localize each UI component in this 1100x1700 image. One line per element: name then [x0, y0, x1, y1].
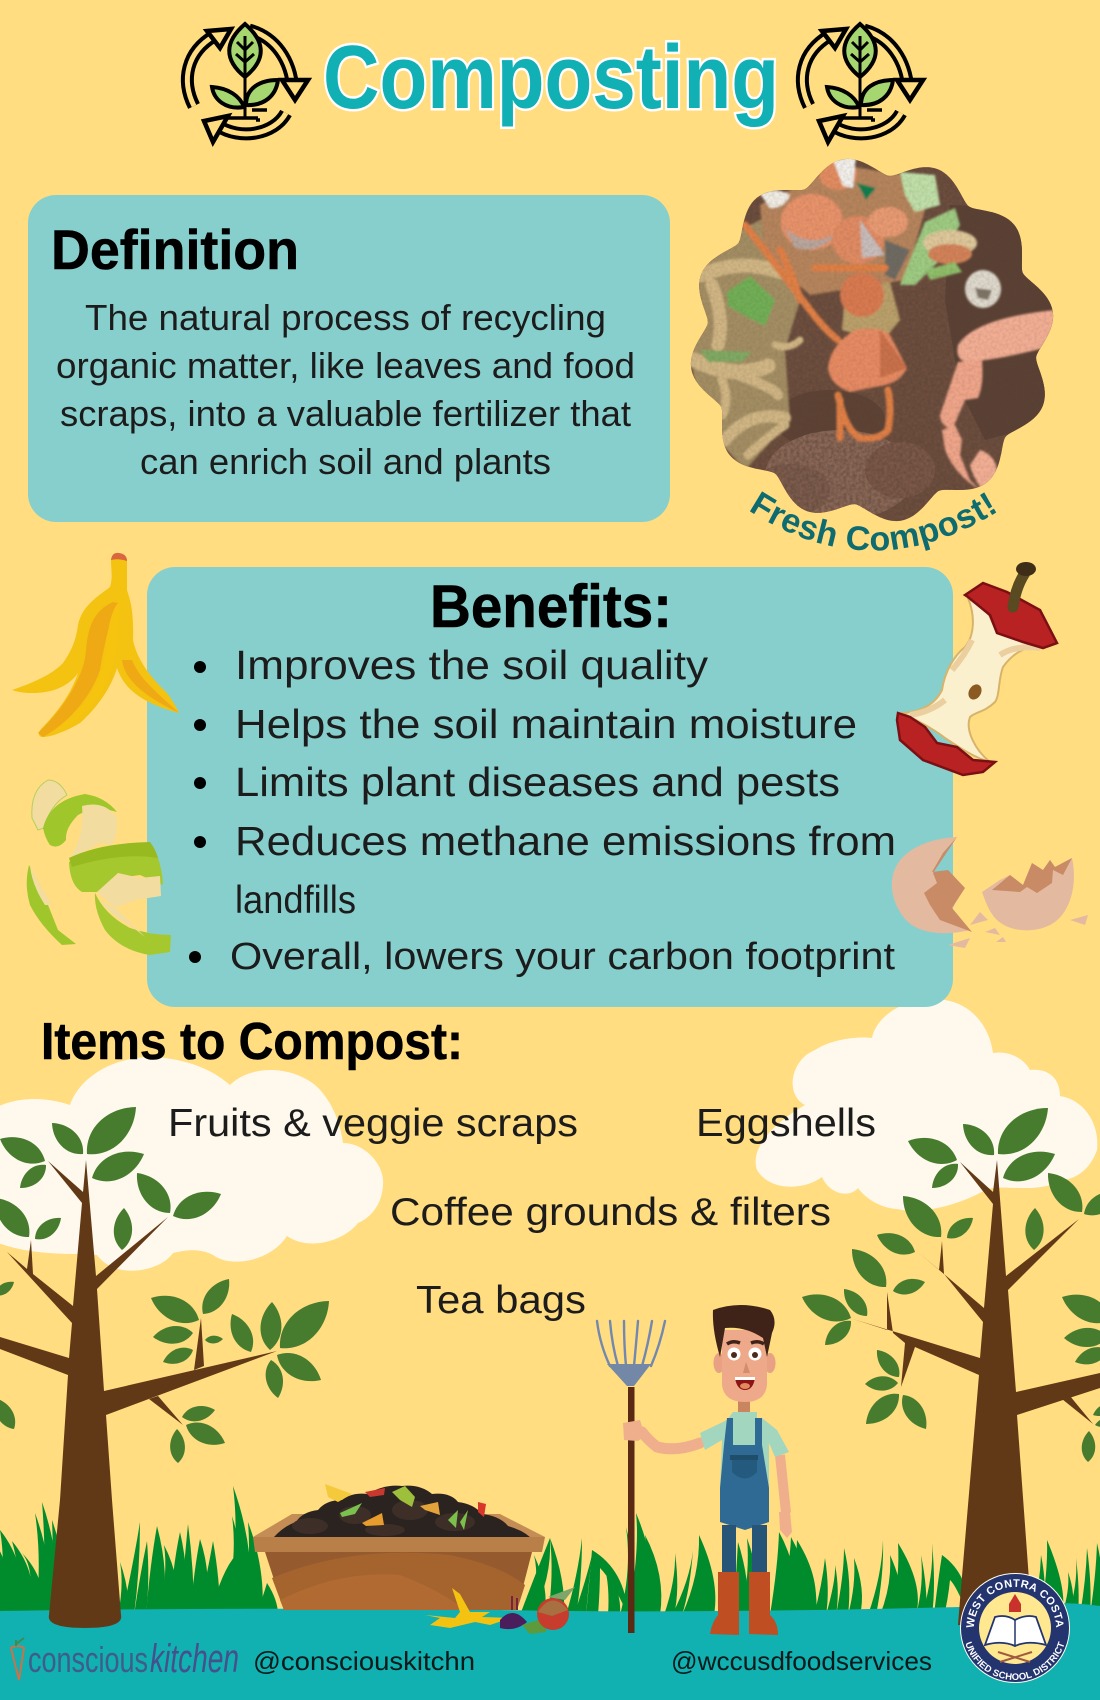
icon: banana peel	[12, 553, 179, 737]
cloud: right	[756, 999, 1097, 1211]
list: compost items: Tea bags	[416, 1279, 586, 1322]
heading: definition: Definition	[51, 218, 299, 281]
icon: apple core	[897, 562, 1057, 775]
list: benefits: landfills	[235, 879, 356, 922]
list: benefits: Reduces methane emissions from	[235, 818, 896, 864]
badge: West Contra Costa Unified School District	[960, 1573, 1070, 1683]
list: benefits: Limits plant diseases and pests	[235, 759, 840, 805]
ground	[0, 1603, 1100, 1700]
illustration: farmer	[623, 1305, 792, 1635]
list: compost items: Fruits & veggie scraps	[168, 1102, 578, 1145]
list: compost items: Coffee grounds & filters	[390, 1191, 831, 1234]
title: Composting	[323, 28, 779, 128]
heading: items to compost: Items to Compost:	[41, 1013, 463, 1071]
tree: right	[797, 1097, 1100, 1625]
text: definition body: organic matter, like leaves and food	[56, 345, 635, 386]
text: conscious kitchen logo: conscious	[28, 1639, 148, 1680]
text: conscious kitchen logo: kitchen	[150, 1637, 239, 1681]
heading: benefits: Benefits:	[430, 573, 672, 640]
panel: definition	[28, 195, 670, 522]
grass	[0, 1486, 1100, 1615]
illustration: rake	[597, 1321, 665, 1633]
text: conscious kitchen handle: @consciouskitchn	[253, 1646, 475, 1676]
caption: fresh compost: Fresh Compost!	[750, 491, 996, 551]
icon: plant with recycling arrows, right	[802, 24, 923, 142]
panel: benefits	[147, 567, 953, 1007]
text: food services handle: @wccusdfoodservices	[671, 1646, 932, 1676]
list: benefits: Improves the soil quality	[235, 642, 709, 688]
list: benefits: Helps the soil maintain moisture	[235, 701, 857, 747]
tree: left	[0, 1096, 339, 1628]
text: definition body	[56, 297, 635, 482]
icon: apple peel	[27, 780, 171, 955]
text: conscious kitchen logo	[11, 1637, 239, 1681]
text: definition body: The natural process of recycling	[85, 297, 606, 338]
icon: plant with recycling arrows, left	[187, 24, 308, 142]
photo: fresh compost	[690, 158, 1054, 522]
text: definition body: can enrich soil and plants	[140, 441, 551, 482]
badge: West Contra Costa Unified School District: UNIFIED SCHOOL DISTRICT	[966, 1641, 1064, 1680]
list: benefits: Overall, lowers your carbon footprint	[230, 936, 895, 978]
text: definition body: scraps, into a valuable fertilizer that	[60, 393, 631, 434]
illustration: compost bin	[253, 1484, 545, 1610]
cloud: left	[0, 1057, 383, 1271]
list: benefits	[189, 642, 896, 978]
icon: carrot	[11, 1646, 24, 1680]
badge: West Contra Costa Unified School District: WEST CONTRA COSTA	[966, 1579, 1064, 1628]
icon: broken eggshells	[892, 837, 1088, 948]
list: compost items	[168, 1102, 876, 1322]
illustration: food scraps on ground	[425, 1587, 575, 1634]
list: compost items: Eggshells	[696, 1102, 876, 1145]
